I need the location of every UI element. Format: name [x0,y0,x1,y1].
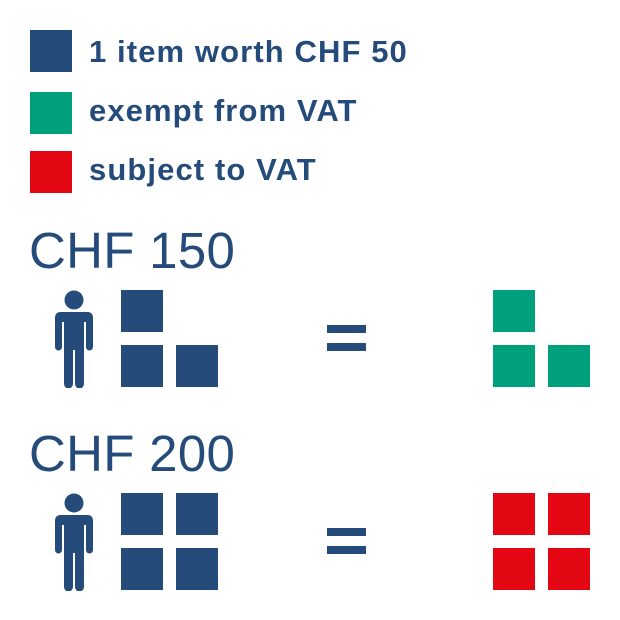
blue items [121,493,163,535]
equals [327,325,366,351]
blue items [121,290,163,332]
icon: person [55,290,93,388]
heading: CHF 150: CHF 150 [29,222,235,279]
icon: person [55,494,93,591]
row 2 [55,493,590,591]
legend: green [30,92,72,134]
legend text: exempt: exempt from VAT [89,93,358,128]
legend text: item: 1 item worth CHF 50 [89,34,408,69]
legend: red [30,151,72,193]
legend text: subject: subject to VAT [89,152,317,187]
row 1 [55,290,590,388]
green items [493,290,535,332]
legend: blue item [30,30,72,72]
red items [493,493,535,535]
equals [327,528,366,554]
heading: CHF 200: CHF 200 [29,425,235,482]
legend [30,30,408,193]
